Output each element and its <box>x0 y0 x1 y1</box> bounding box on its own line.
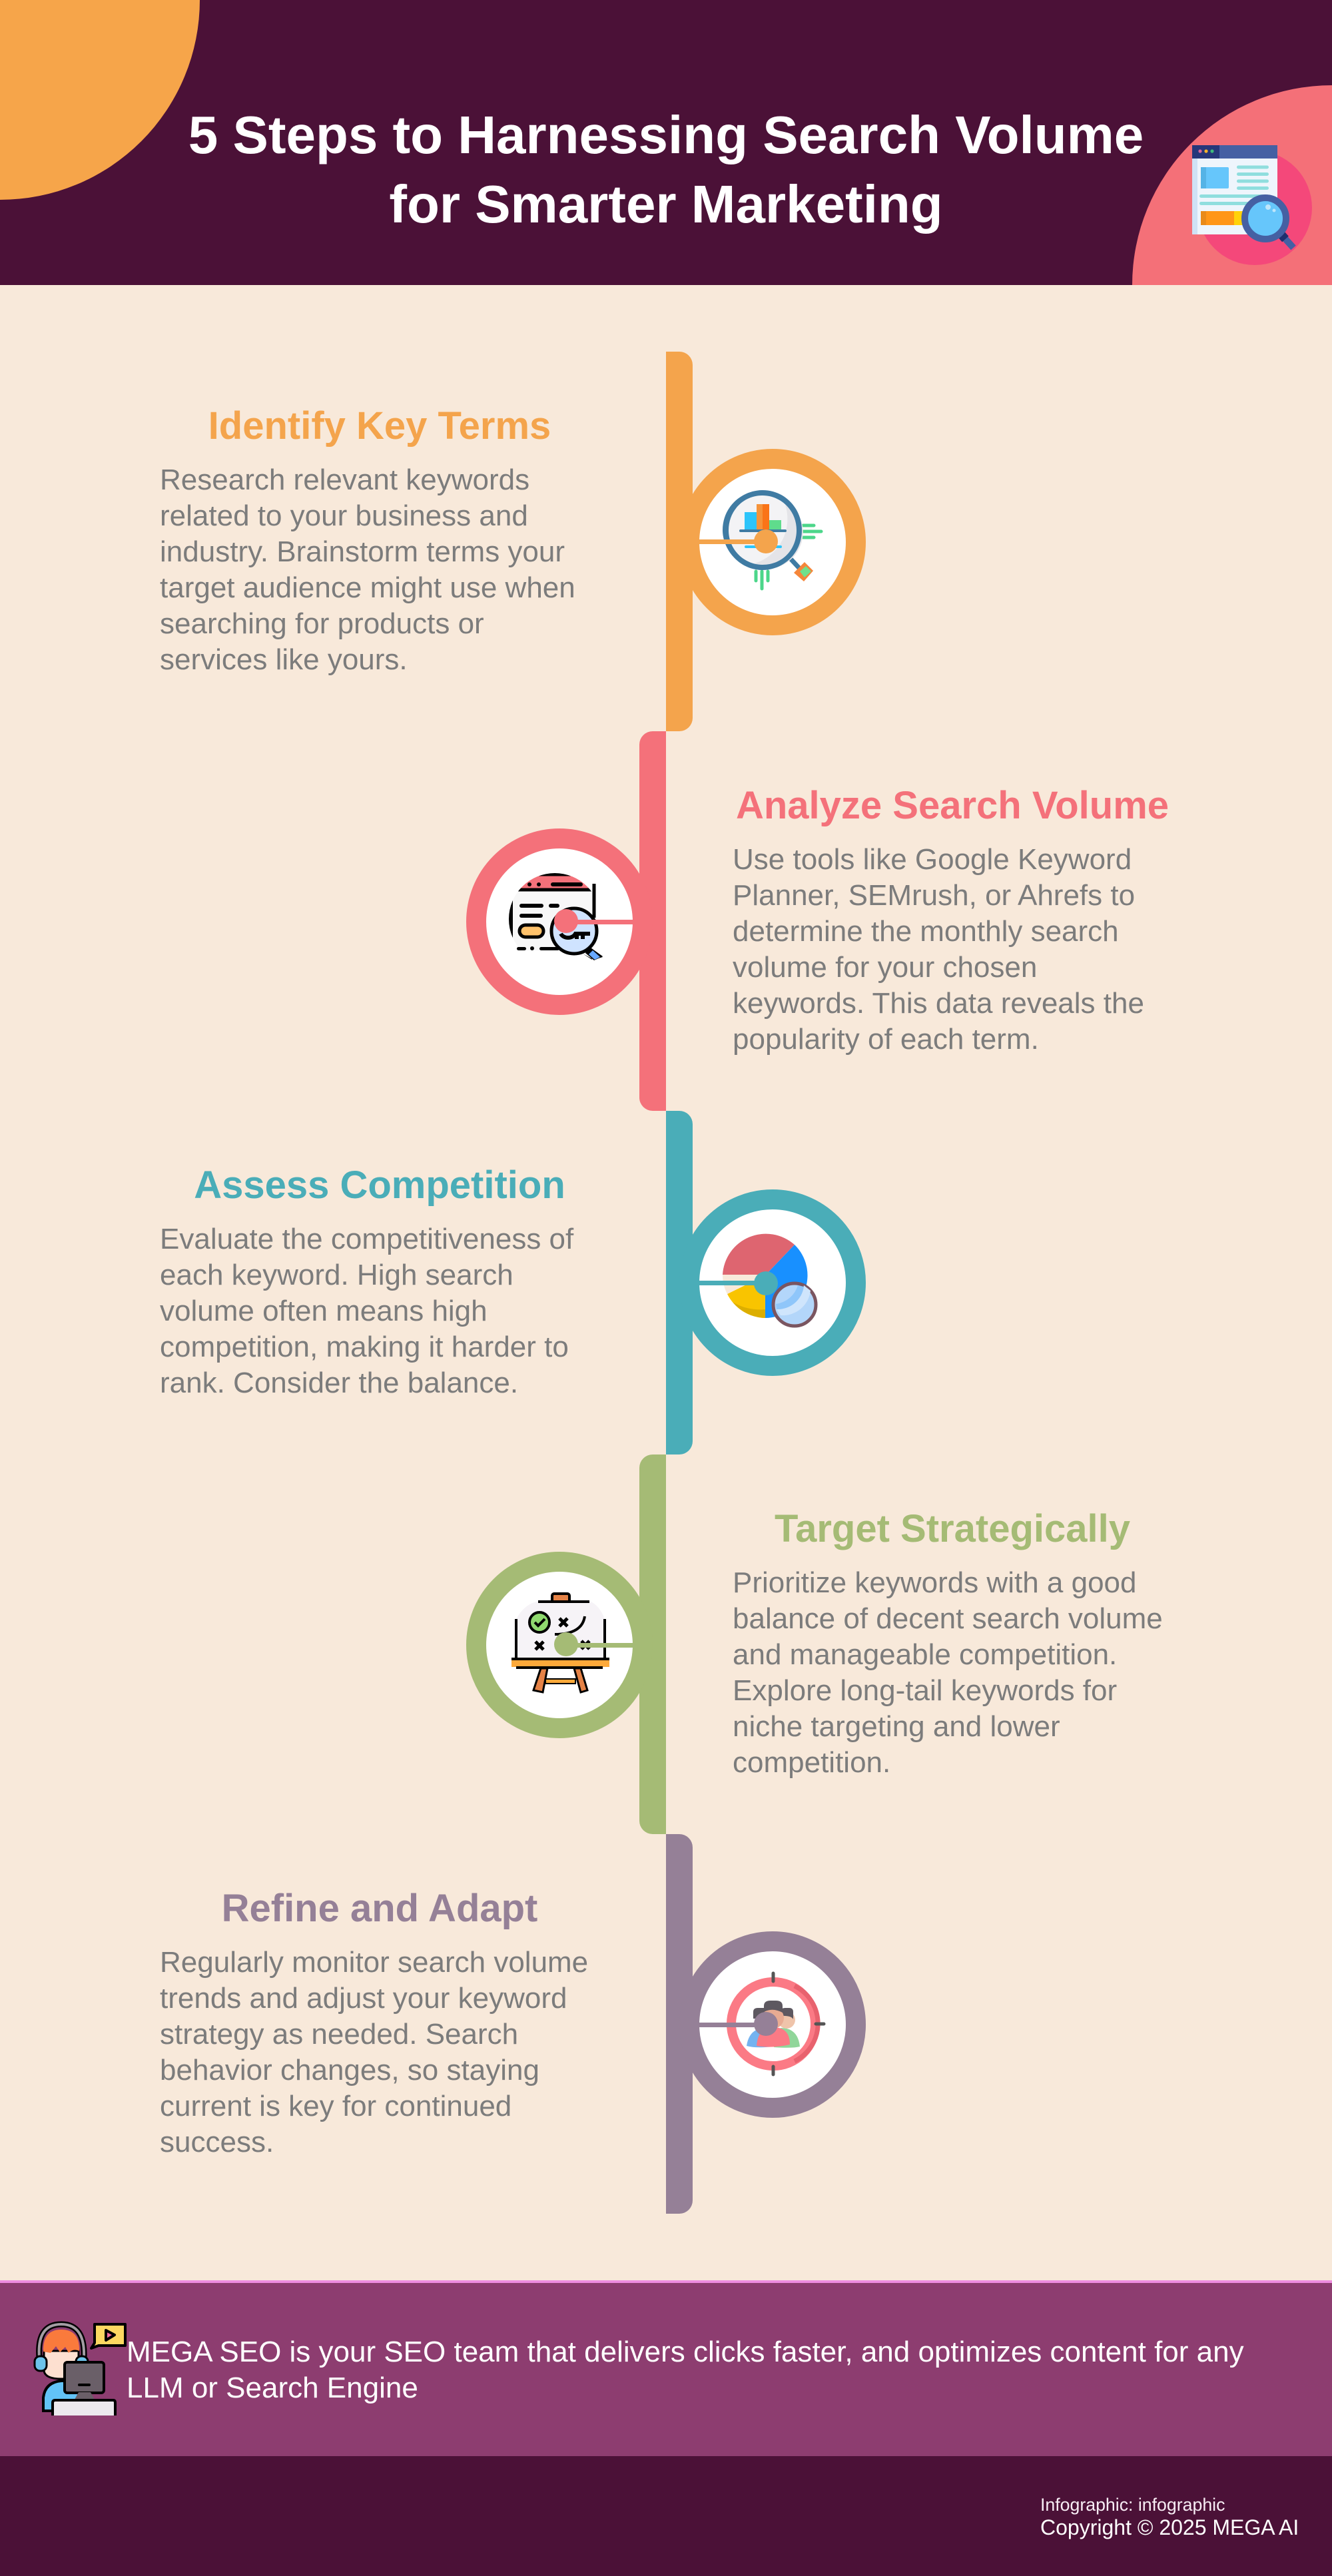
step 4: Target Strategically <box>476 1454 1163 1834</box>
body text 2: popularity of each term. <box>733 1023 1039 1056</box>
step 5: Refine and Adapt <box>160 1834 856 2214</box>
pointer line and dot 5 <box>699 2012 778 2036</box>
ring 4 <box>476 1562 643 1728</box>
body text 3: volume often means high <box>160 1295 488 1327</box>
body text 1: services like yours. <box>160 643 408 676</box>
body text 2: Planner, SEMrush, or Ahrefs to <box>733 879 1135 912</box>
heading 2: Analyze Search Volume <box>736 784 1169 827</box>
title: 5 Steps to Harnessing Search Volume <box>188 105 1144 164</box>
icon: strategy board on easel <box>511 1594 609 1692</box>
step 1: Identify Key Terms <box>160 352 856 731</box>
body text 5: trends and adjust your keyword <box>160 1982 567 2015</box>
body text 1: industry. Brainstorm terms your <box>160 535 565 568</box>
ring 5 <box>689 1941 856 2108</box>
header band <box>0 0 1332 285</box>
ring 3 <box>689 1199 856 1366</box>
ring 2 <box>476 838 643 1005</box>
pointer line and dot 1 <box>699 529 778 553</box>
timeline bar 2 <box>639 731 666 1111</box>
body text 2: volume for your chosen <box>733 951 1037 984</box>
body text 4: niche targeting and lower <box>733 1710 1060 1743</box>
timeline bar 4 <box>639 1454 666 1834</box>
body text 4: Explore long-tail keywords for <box>733 1674 1117 1707</box>
decorative orange quarter circle <box>0 0 200 200</box>
body text 4: Prioritize keywords with a good <box>733 1566 1136 1599</box>
body text 2: keywords. This data reveals the <box>733 987 1144 1020</box>
step 3: Assess Competition <box>160 1111 856 1454</box>
pointer line and dot 4 <box>554 1632 633 1656</box>
pointer line and dot 2 <box>554 909 633 933</box>
body text 3: competition, making it harder to <box>160 1331 569 1363</box>
timeline bar 3 <box>666 1111 693 1454</box>
body text 1: searching for products or <box>160 607 484 640</box>
copyright: Copyright © 2025 MEGA AI <box>1040 2515 1299 2539</box>
body text 4: balance of decent search volume <box>733 1602 1163 1635</box>
icon: magnifier over bar chart <box>723 490 821 589</box>
timeline bar 1 <box>666 352 693 731</box>
decorative coral quarter circle <box>1132 85 1332 285</box>
ring 1 <box>689 459 856 625</box>
step 2: Analyze Search Volume <box>476 731 1169 1111</box>
icon: pie chart with magnifier <box>723 1234 816 1326</box>
banner text: MEGA SEO is your SEO team that delivers clicks faster, and optimizes content for any <box>127 2336 1244 2368</box>
icon: audience target <box>731 1973 824 2075</box>
footer band <box>0 2456 1332 2576</box>
body text 4: and manageable competition. <box>733 1638 1117 1671</box>
body text 2: Use tools like Google Keyword <box>733 843 1132 876</box>
heading 3: Assess Competition <box>194 1163 565 1207</box>
pointer line and dot 3 <box>699 1271 778 1295</box>
icon: support agent at computer <box>35 2324 125 2415</box>
timeline bar 5 <box>666 1834 693 2214</box>
body text 5: current is key for continued <box>160 2090 511 2122</box>
body text 5: strategy as needed. Search <box>160 2018 518 2051</box>
body text 3: Evaluate the competitiveness of <box>160 1223 574 1255</box>
body text 1: Research relevant keywords <box>160 464 529 496</box>
banner text: LLM or Search Engine <box>127 2372 418 2404</box>
body text 1: related to your business and <box>160 499 528 532</box>
footer credit: Infographic: infographic <box>1040 2495 1225 2515</box>
heading 5: Refine and Adapt <box>222 1887 537 1930</box>
body text 5: behavior changes, so staying <box>160 2054 539 2087</box>
body text 3: each keyword. High search <box>160 1259 513 1291</box>
body text 5: success. <box>160 2126 274 2158</box>
icon: web page with magnifier <box>1192 145 1312 265</box>
body text 4: competition. <box>733 1746 890 1779</box>
title: for Smarter Marketing <box>389 174 943 234</box>
body text 1: target audience might use when <box>160 571 575 604</box>
heading 1: Identify Key Terms <box>208 404 551 448</box>
icon: browser window with key magnifier <box>511 873 603 960</box>
body text 2: determine the monthly search <box>733 915 1119 948</box>
body text 3: rank. Consider the balance. <box>160 1367 518 1399</box>
promo banner <box>0 2280 1332 2456</box>
heading 4: Target Strategically <box>775 1507 1130 1550</box>
body text 5: Regularly monitor search volume <box>160 1946 588 1979</box>
